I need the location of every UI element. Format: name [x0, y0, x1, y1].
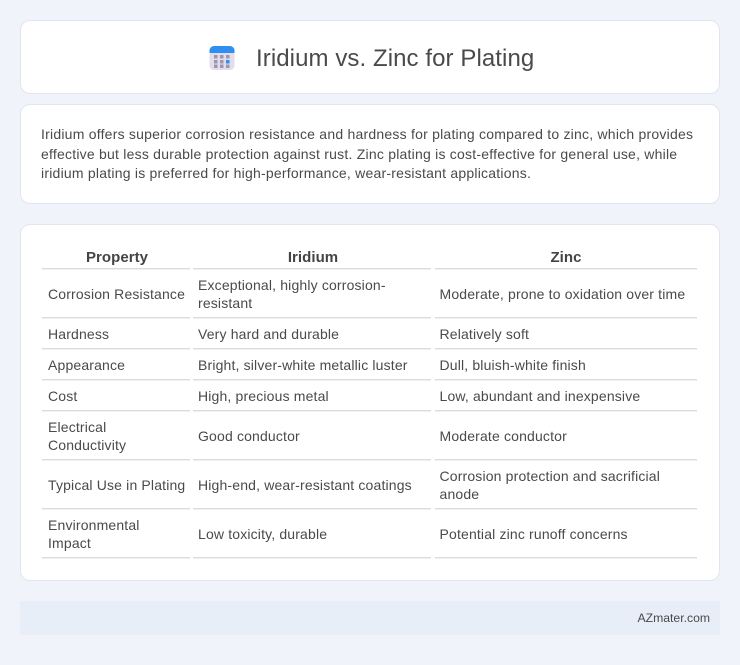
row: environmental impact: Potential zinc runoff concerns — [440, 526, 628, 542]
row: corrosion resistance: resistant — [198, 295, 252, 311]
row: electrical conductivity: Electrical — [48, 419, 106, 435]
summary text: iridium plating is preferred for high-performance, wear-resistant applications. — [41, 165, 531, 181]
table header: Iridium — [288, 249, 338, 266]
panel: summary — [20, 104, 720, 204]
footer bar — [20, 601, 720, 635]
row: electrical conductivity — [48, 419, 567, 453]
footer credit: AZmater.com — [638, 611, 710, 625]
row: corrosion resistance: Corrosion Resistance — [48, 286, 185, 302]
row: cost — [48, 388, 640, 404]
panel: comparison table — [20, 224, 720, 581]
row: hardness: Hardness — [48, 326, 109, 342]
row: environmental impact — [48, 517, 628, 551]
row: environmental impact: Environmental — [48, 517, 140, 533]
row: corrosion resistance — [48, 277, 685, 311]
title: Iridium vs. Zinc for Plating — [256, 45, 534, 72]
row: appearance: Dull, bluish-white finish — [440, 357, 586, 373]
row: environmental impact: Low toxicity, durable — [198, 526, 327, 542]
row: typical use: Typical Use in Plating — [48, 477, 185, 493]
row: appearance: Bright, silver-white metallic luster — [198, 357, 408, 373]
row: electrical conductivity: Good conductor — [198, 428, 300, 444]
row: cost: High, precious metal — [198, 388, 329, 404]
icon: calendar — [210, 46, 234, 70]
table header: Property — [86, 249, 148, 266]
row: corrosion resistance: Moderate, prone to oxidation over time — [440, 286, 685, 302]
row: typical use — [48, 468, 660, 502]
summary text: effective but less durable protection against rust. Zinc plating is cost-effective for general use, while — [41, 146, 677, 162]
row: hardness — [48, 326, 529, 342]
row: corrosion resistance: Exceptional, highly corrosion- — [198, 277, 386, 293]
row: hardness: Relatively soft — [440, 326, 529, 342]
panel: title header — [20, 20, 720, 94]
row: appearance — [48, 357, 586, 373]
row: typical use: anode — [440, 486, 479, 502]
row: hardness: Very hard and durable — [198, 326, 339, 342]
table header — [86, 249, 582, 266]
row: electrical conductivity: Conductivity — [48, 437, 126, 453]
summary text — [41, 126, 693, 181]
row: typical use: High-end, wear-resistant coatings — [198, 477, 412, 493]
summary text: Iridium offers superior corrosion resistance and hardness for plating compared to zinc, which provides — [41, 126, 693, 142]
row: typical use: Corrosion protection and sacrificial — [440, 468, 660, 484]
row: cost: Cost — [48, 388, 77, 404]
row: environmental impact: Impact — [48, 535, 91, 551]
row: appearance: Appearance — [48, 357, 125, 373]
row: cost: Low, abundant and inexpensive — [440, 388, 640, 404]
table header: Zinc — [550, 249, 582, 266]
row: electrical conductivity: Moderate conductor — [440, 428, 567, 444]
